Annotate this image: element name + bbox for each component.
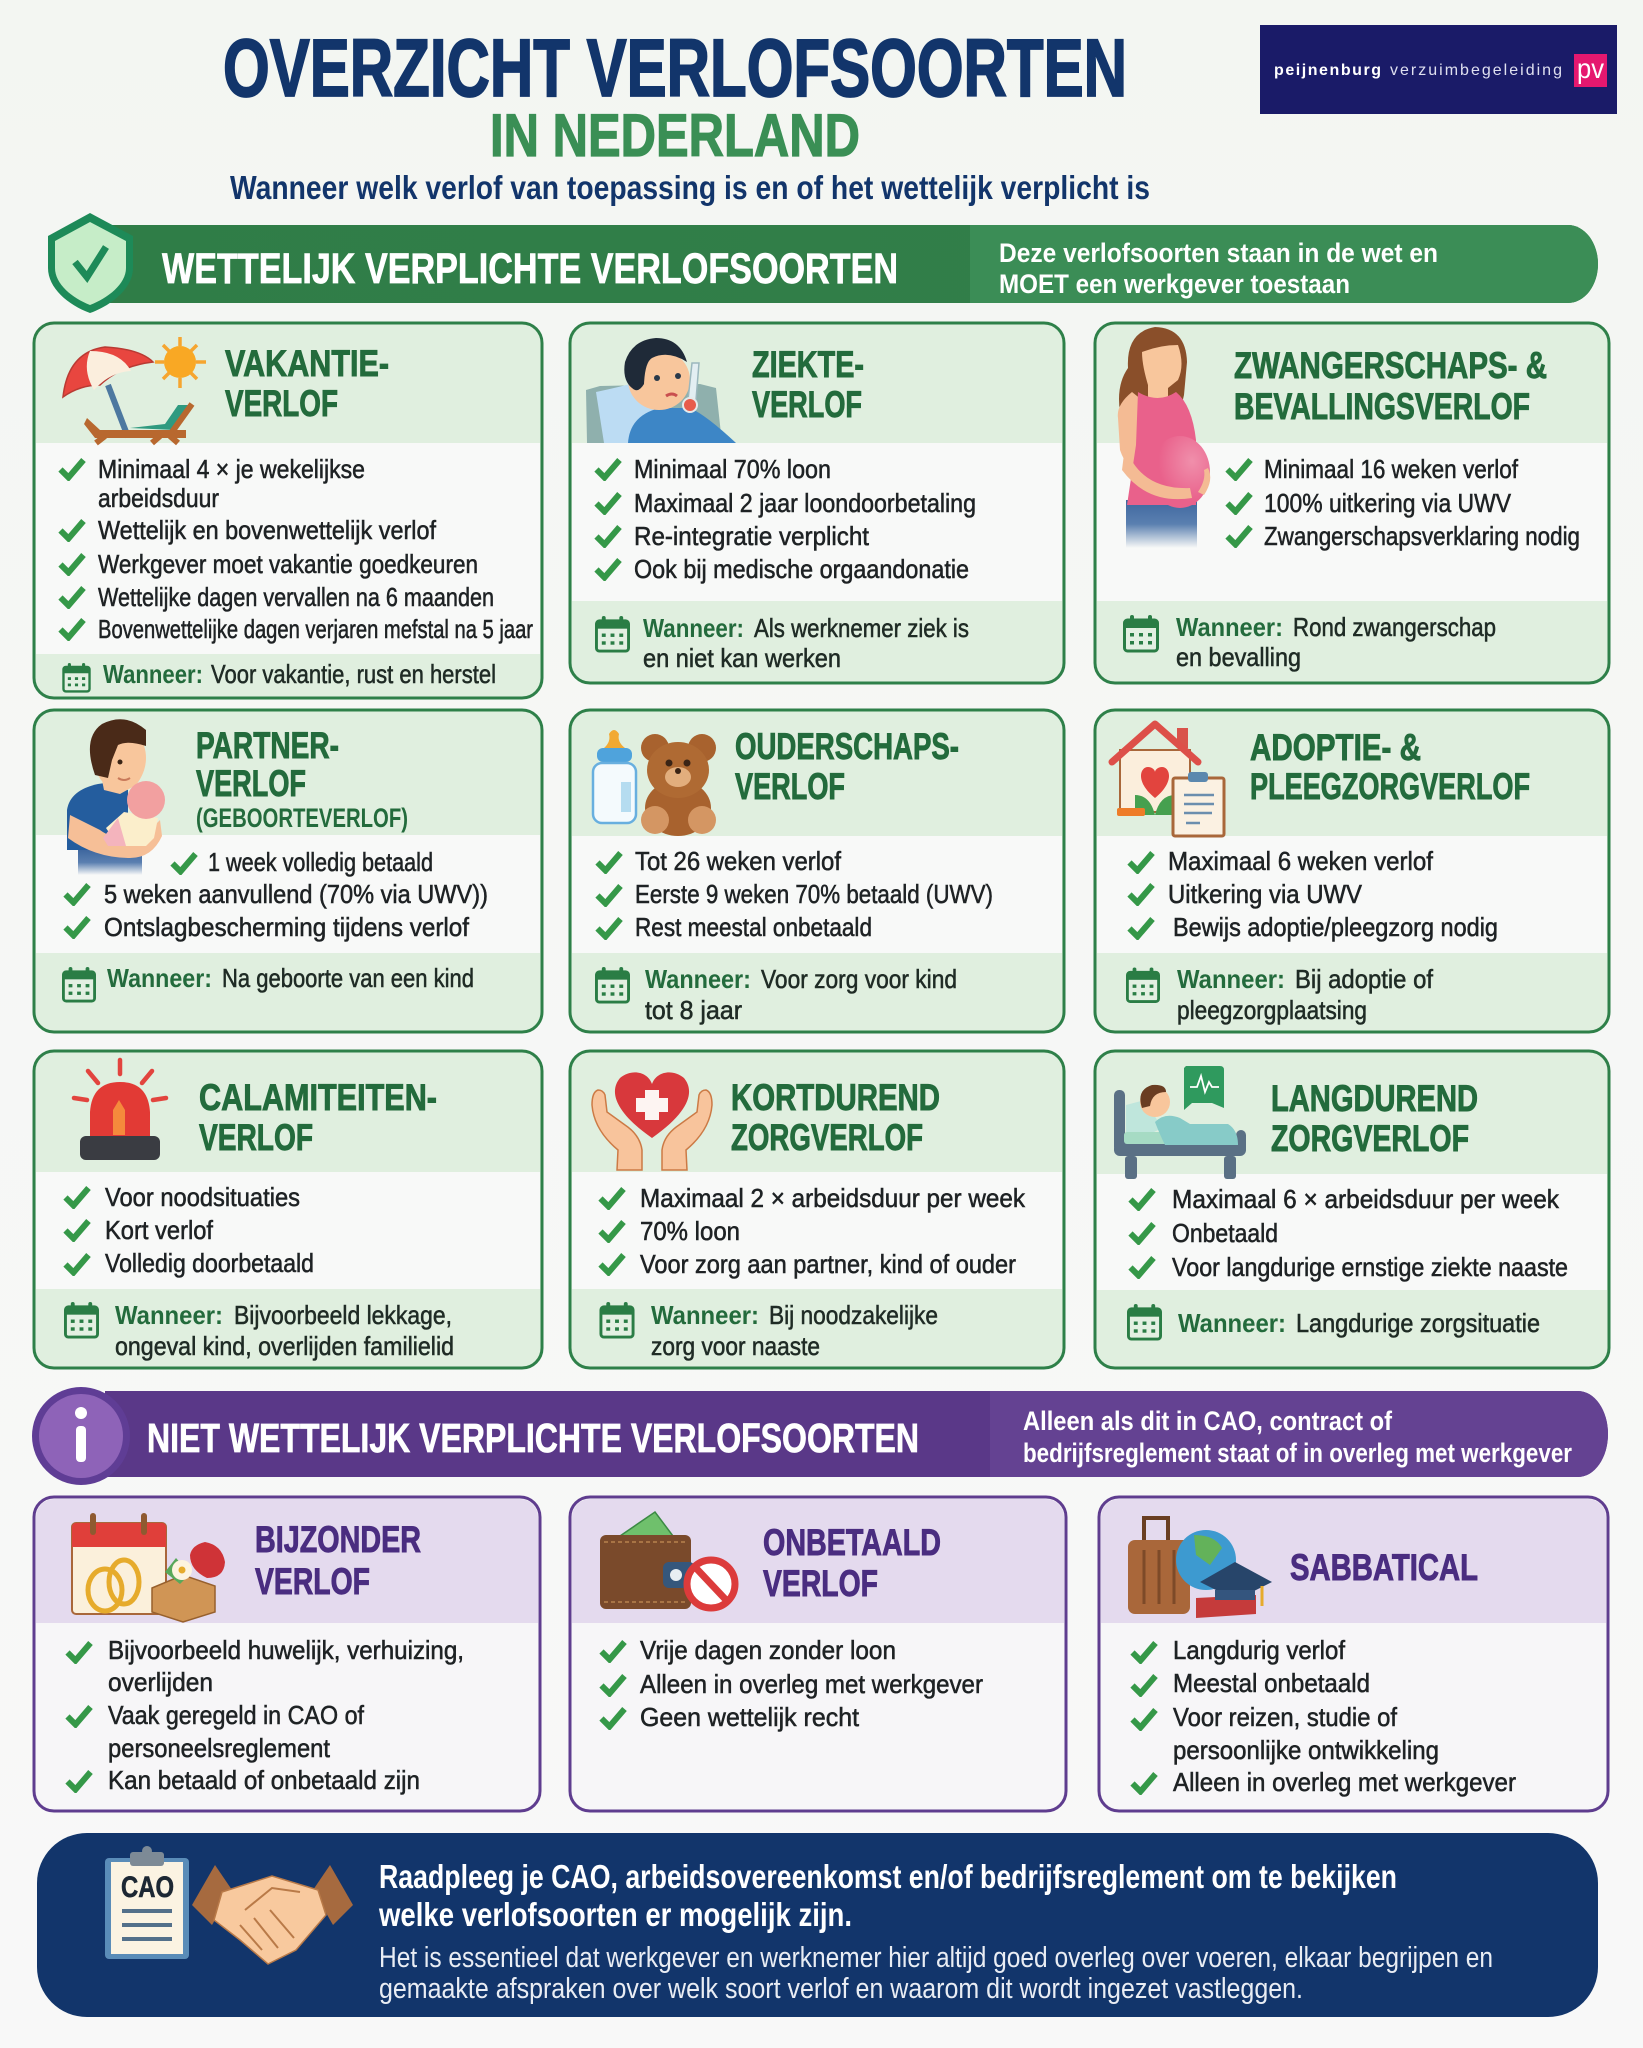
list: Minimaal 16 weken verlof (1264, 454, 1519, 484)
wanneer (596, 964, 957, 1025)
heading (752, 344, 864, 425)
icon: patient in bed (1114, 1066, 1246, 1179)
list: Onbetaald (1172, 1218, 1278, 1248)
wanneer: Bij adoptie of (1295, 964, 1434, 994)
wanneer: Rond zwangerschap (1293, 612, 1496, 642)
wanneer: pleegzorgplaatsing (1177, 995, 1367, 1025)
heading: ZIEKTE- (752, 344, 864, 385)
heading (731, 1077, 940, 1158)
heading (763, 1522, 941, 1604)
panel: zwangerschapsverlof (1095, 323, 1609, 683)
list: Bovenwettelijke dagen verjaren mefstal na 5 jaar (98, 614, 533, 644)
icon: house and clipboard (1112, 724, 1224, 836)
wanneer (1128, 1304, 1540, 1339)
wanneer (1124, 612, 1496, 672)
wanneer (1127, 964, 1434, 1025)
list: arbeidsduur (98, 483, 219, 513)
banner heading: NIET WETTELIJK VERPLICHTE VERLOFSOORTEN (147, 1415, 919, 1461)
list: Maximaal 2 jaar loondoorbetaling (634, 488, 976, 518)
wanneer: Voor vakantie, rust en herstel (211, 659, 496, 689)
list (66, 1182, 314, 1278)
panel: onbetaald verlof (570, 1497, 1066, 1811)
callout body: gemaakte afspraken over welk soort verlof en waarom dit wordt ingezet vastleggen. (379, 1973, 1303, 2005)
logo (1260, 25, 1617, 114)
wanneer: Wanneer: (651, 1300, 759, 1330)
heading (1271, 1078, 1478, 1159)
panel: langdurend zorgverlof (1095, 1051, 1609, 1368)
logo: verzuimbegeleiding (1390, 62, 1562, 79)
list (596, 454, 976, 584)
list: Vrije dagen zonder loon (640, 1635, 896, 1665)
list: Rest meestal onbetaald (635, 912, 872, 942)
heading: OUDERSCHAPS- (735, 726, 959, 767)
list (1228, 454, 1580, 551)
heading (255, 1519, 421, 1602)
heading (1234, 345, 1547, 427)
list (1132, 1635, 1516, 1797)
heading: ZORGVERLOF (731, 1117, 923, 1158)
heading: VERLOF (763, 1563, 878, 1604)
panel: calamiteitenverlof (34, 1051, 542, 1368)
wanneer: ongeval kind, overlijden familielid (115, 1331, 454, 1361)
heading: CALAMITEITEN- (199, 1077, 437, 1118)
banner heading: WETTELIJK VERPLICHTE VERLOFSOORTEN (162, 245, 898, 293)
wanneer: Voor zorg voor kind (761, 964, 957, 994)
list: Voor noodsituaties (105, 1182, 300, 1212)
list: Geen wettelijk recht (640, 1702, 860, 1732)
list (602, 1635, 983, 1732)
heading: ONBETAALD (763, 1522, 941, 1563)
banner note: MOET een werkgever toestaan (999, 269, 1350, 299)
callout body (379, 1942, 1493, 2005)
icon: shield (48, 213, 133, 313)
list: Meestal onbetaald (1173, 1668, 1370, 1698)
heading (196, 725, 408, 833)
list (1130, 1184, 1568, 1282)
wanneer: Wanneer: (643, 613, 744, 643)
banner note: Alleen als dit in CAO, contract of (1023, 1406, 1393, 1436)
list: Ontslagbescherming tijdens verlof (104, 912, 470, 942)
list: Kort verlof (105, 1215, 214, 1245)
heading (1250, 727, 1530, 807)
wanneer: Wanneer: (1178, 1308, 1286, 1338)
icon: info circle (32, 1387, 130, 1485)
list: Kan betaald of onbetaald zijn (108, 1765, 420, 1795)
list: persoonlijke ontwikkeling (1173, 1735, 1439, 1765)
list: Alleen in overleg met werkgever (1173, 1767, 1516, 1797)
icon: CAO clipboard (105, 1846, 189, 1959)
list: Maximaal 2 × arbeidsduur per week (640, 1183, 1026, 1213)
list: Minimaal 70% loon (634, 454, 831, 484)
icon: handshake (192, 1865, 353, 1964)
list: Volledig doorbetaald (105, 1248, 314, 1278)
panel: sabbatical (1099, 1497, 1608, 1811)
list: Re-integratie verplicht (634, 521, 870, 551)
heading: SABBATICAL (1290, 1547, 1478, 1588)
wanneer (63, 659, 496, 691)
list: 70% loon (640, 1216, 740, 1246)
wanneer: Wanneer: (103, 659, 203, 689)
icon: pregnant woman (1118, 327, 1210, 548)
panel: vakantieverlof (34, 323, 542, 698)
heading: PARTNER- (196, 725, 339, 766)
wanneer: Wanneer: (645, 964, 751, 994)
callout: CAO advice (37, 1833, 1598, 2017)
wanneer (596, 613, 969, 673)
heading: (GEBOORTEVERLOF) (196, 803, 408, 833)
list: Bijvoorbeeld huwelijk, verhuizing, (108, 1635, 464, 1665)
banner note: Deze verlofsoorten staan in de wet en (999, 238, 1438, 268)
list: Uitkering via UWV (1168, 879, 1363, 909)
heading: ZWANGERSCHAPS- & (1234, 345, 1547, 386)
subtitle: in Nederland: IN NEDERLAND (490, 102, 860, 169)
wanneer: Langdurige zorgsituatie (1296, 1308, 1540, 1338)
wanneer: zorg voor naaste (651, 1331, 820, 1361)
tagline: Wanneer welk verlof van toepassing is en of het wettelijk verplicht is (230, 169, 1150, 206)
wanneer: tot 8 jaar (645, 995, 742, 1025)
icon: bottle and teddy bear (593, 730, 716, 836)
list: Eerste 9 weken 70% betaald (UWV) (635, 879, 993, 909)
list: 5 weken aanvullend (70% via UWV)) (104, 879, 488, 909)
banner: niet wettelijk verplicht (32, 1387, 1608, 1485)
wanneer: Wanneer: (1177, 964, 1285, 994)
callout heading: welke verlofsoorten er mogelijk zijn. (378, 1896, 852, 1933)
wanneer: Wanneer: (107, 963, 212, 993)
heading: VAKANTIE- (225, 343, 389, 384)
panel: ouderschapsverlof (570, 710, 1064, 1032)
list: Zwangerschapsverklaring nodig (1264, 521, 1580, 551)
heading (225, 343, 389, 424)
heading: ADOPTIE- & (1250, 727, 1421, 768)
list: Voor langdurige ernstige ziekte naaste (1172, 1252, 1568, 1282)
list (600, 1183, 1026, 1279)
title: OVERZICHT VERLOFSOORTEN (223, 23, 1127, 114)
panel: partnerverlof (34, 710, 542, 1032)
heading: LANGDUREND (1271, 1078, 1478, 1119)
wanneer: Als werknemer ziek is (754, 613, 969, 643)
heading: VERLOF (735, 766, 845, 807)
list: Werkgever moet vakantie goedkeuren (98, 549, 478, 579)
wanneer (601, 1300, 938, 1361)
heading: ZORGVERLOF (1271, 1118, 1469, 1159)
icon: calendar, rings and flower box (72, 1513, 225, 1622)
panel: bijzonder verlof (34, 1497, 540, 1811)
list: Wettelijk en bovenwettelijk verlof (98, 515, 437, 545)
heading: VERLOF (752, 384, 862, 425)
list: Voor zorg aan partner, kind of ouder (640, 1249, 1016, 1279)
wanneer (65, 1300, 454, 1361)
icon: father with baby (67, 719, 165, 875)
list: 1 week volledig betaald (208, 847, 433, 877)
icon: parasol, sun and lounger (63, 337, 206, 443)
wanneer: Wanneer: (1176, 612, 1283, 642)
heading: BEVALLINGSVERLOF (1234, 386, 1530, 427)
panel: adoptie en pleegzorgverlof (1095, 710, 1609, 1032)
panel: ziekteverlof (570, 323, 1064, 683)
callout heading (378, 1858, 1397, 1933)
heading: VERLOF (199, 1117, 313, 1158)
wanneer: Bij noodzakelijke (769, 1300, 938, 1330)
heading: KORTDUREND (731, 1077, 940, 1118)
wanneer: en bevalling (1176, 642, 1301, 672)
list: overlijden (108, 1667, 213, 1697)
logo: peijnenburg (1274, 62, 1381, 79)
heading: VERLOF (196, 763, 306, 804)
list: Tot 26 weken verlof (635, 846, 842, 876)
list: Alleen in overleg met werkgever (640, 1669, 983, 1699)
heading (199, 1077, 437, 1158)
panel: kortdurend zorgverlof (570, 1051, 1064, 1368)
icon: hands and heart (592, 1072, 712, 1170)
list: Maximaal 6 × arbeidsduur per week (1172, 1184, 1560, 1214)
heading: BIJZONDER (255, 1519, 421, 1560)
list: 100% uitkering via UWV (1264, 488, 1512, 518)
icon: siren (74, 1060, 166, 1160)
heading (735, 726, 959, 807)
wanneer: Bijvoorbeeld lekkage, (234, 1300, 452, 1330)
banner note (1023, 1406, 1572, 1468)
list (66, 847, 488, 942)
wanneer (63, 963, 474, 1001)
wanneer: Na geboorte van een kind (222, 963, 474, 993)
list: personeelsreglement (108, 1733, 331, 1763)
heading: VERLOF (225, 383, 338, 424)
list: Voor reizen, studie of (1173, 1702, 1398, 1732)
wanneer: Wanneer: (115, 1300, 223, 1330)
list (60, 454, 533, 644)
list (598, 846, 993, 942)
list: Bewijs adoptie/pleegzorg nodig (1173, 912, 1498, 942)
wanneer: en niet kan werken (643, 643, 841, 673)
list (68, 1635, 464, 1795)
list: Maximaal 6 weken verlof (1168, 846, 1434, 876)
list: Vaak geregeld in CAO of (108, 1700, 365, 1730)
icon: sick person (586, 338, 736, 443)
icon: CAO clipboard: CAO (121, 1871, 174, 1904)
icon: suitcase, globe and graduation cap (1128, 1518, 1272, 1618)
list: Minimaal 4 × je wekelijkse (98, 454, 365, 484)
list: Ook bij medische orgaandonatie (634, 554, 969, 584)
heading: PLEEGZORGVERLOF (1250, 766, 1530, 807)
banner: wettelijk verplicht (48, 213, 1598, 313)
callout heading: Raadpleeg je CAO, arbeidsovereenkomst en/of bedrijfsreglement om te bekijken (379, 1858, 1397, 1895)
list (1130, 846, 1498, 942)
icon: wallet and no sign (600, 1512, 735, 1609)
list: Wettelijke dagen vervallen na 6 maanden (98, 582, 494, 612)
logo: pv (1577, 53, 1604, 84)
list: Langdurig verlof (1173, 1635, 1346, 1665)
banner note (999, 238, 1438, 299)
heading: VERLOF (255, 1561, 370, 1602)
